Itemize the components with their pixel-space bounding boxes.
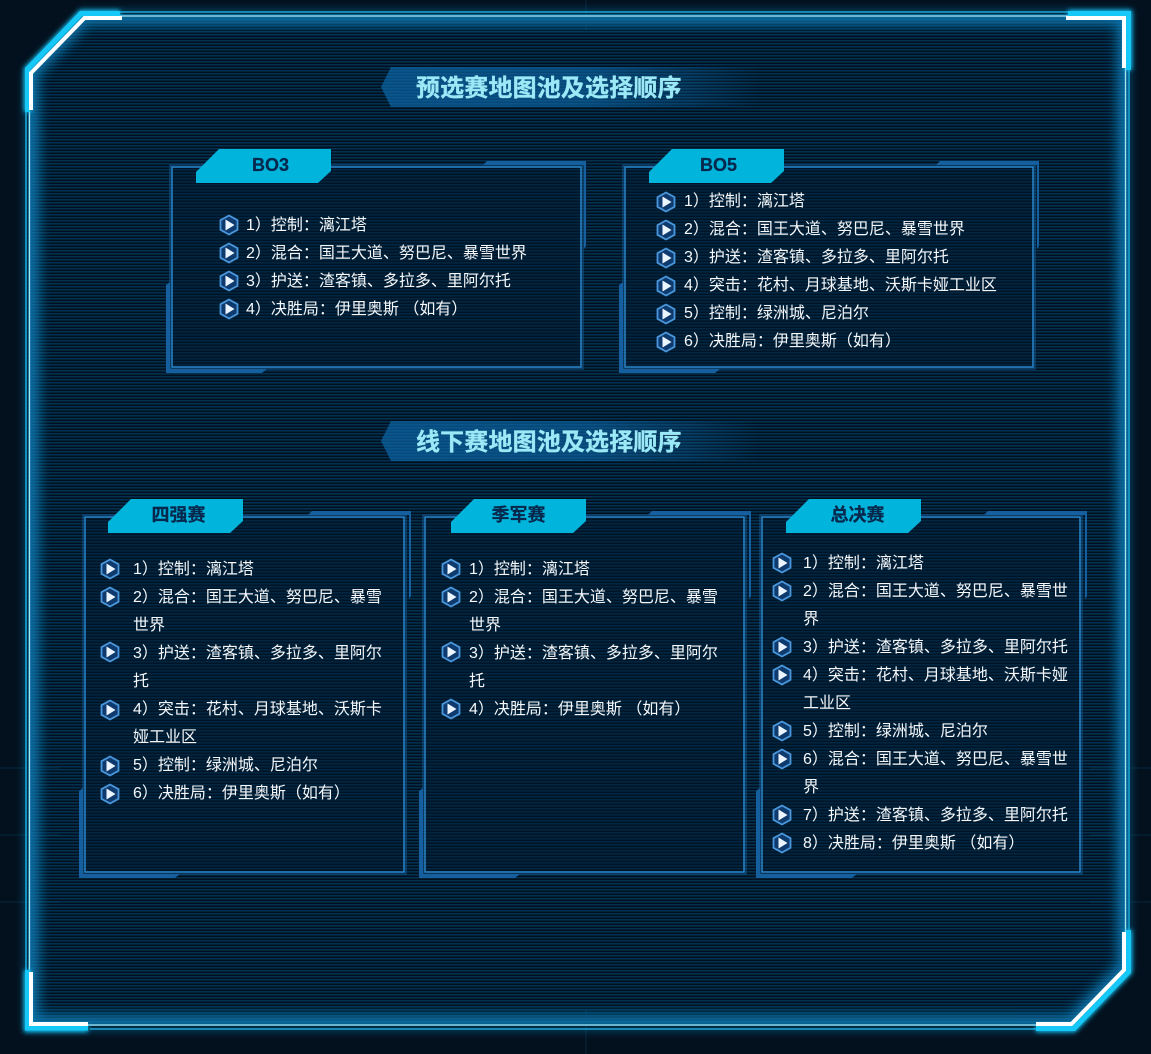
item: 7）护送：渣客镇、多拉多、里阿尔托	[803, 807, 1068, 824]
heading: 预选赛地图池及选择顺序	[381, 67, 744, 107]
tab: 季军赛: 季军赛	[492, 505, 546, 525]
item	[469, 588, 718, 634]
icon	[772, 636, 792, 658]
panel: 四强赛: 世界	[133, 617, 165, 634]
icon	[220, 298, 238, 320]
icon	[772, 748, 792, 770]
panel: 季军赛: 世界	[469, 617, 501, 634]
heading: 预选赛地图池及选择顺序: 预选赛地图池及选择顺序	[416, 75, 682, 102]
item: 6）决胜局：伊里奥斯（如有）	[684, 333, 901, 350]
item: 8）决胜局：伊里奥斯 （如有）	[803, 835, 1024, 852]
icon	[656, 332, 676, 352]
item: 3）护送：渣客镇、多拉多、里阿尔	[469, 645, 718, 662]
item: 4）突击：花村、月球基地、沃斯卡娅	[803, 667, 1068, 684]
item: 2）混合：国王大道、努巴尼、暴雪世界	[684, 221, 965, 238]
item	[803, 582, 1068, 628]
panel: 总决赛: 界	[803, 779, 819, 796]
tab: 四强赛: 四强赛	[152, 505, 206, 525]
tab: BO5: BO5	[700, 155, 737, 175]
icon	[100, 586, 120, 608]
panel: 总决赛: 界	[803, 611, 819, 628]
item: 4）决胜局：伊里奥斯 （如有）	[469, 701, 690, 718]
item: 4）突击：花村、月球基地、沃斯卡	[133, 701, 382, 718]
icon	[220, 242, 238, 264]
item: 6）决胜局：伊里奥斯（如有）	[133, 785, 350, 802]
icon	[100, 756, 120, 776]
item: 5）控制：绿洲城、尼泊尔	[684, 305, 869, 322]
item: 2）混合：国王大道、努巴尼、暴雪	[469, 589, 718, 606]
icon	[772, 552, 792, 574]
item: 4）决胜局：伊里奥斯 （如有）	[246, 301, 467, 318]
icon	[656, 276, 676, 296]
item	[133, 588, 382, 634]
item: 1）控制：漓江塔	[803, 555, 924, 572]
icon	[772, 664, 792, 686]
panel: 总决赛: 工业区	[803, 695, 851, 712]
icon	[100, 642, 120, 662]
icon	[442, 558, 460, 580]
item: 2）混合：国王大道、努巴尼、暴雪	[133, 589, 382, 606]
item: 1）控制：漓江塔	[133, 561, 254, 578]
heading: 线下赛地图池及选择顺序	[381, 421, 744, 461]
tab: 总决赛: 总决赛	[830, 505, 884, 525]
item	[469, 644, 718, 690]
item: 2）混合：国王大道、努巴尼、暴雪世界	[246, 245, 527, 262]
icon	[220, 214, 238, 236]
icon	[100, 784, 120, 804]
item: 3）护送：渣客镇、多拉多、里阿尔托	[246, 273, 511, 290]
tab: BO3: BO3	[252, 155, 289, 175]
icon	[100, 558, 120, 580]
item: 4）突击：花村、月球基地、沃斯卡娅工业区	[684, 277, 997, 294]
item: 3）护送：渣客镇、多拉多、里阿尔	[133, 645, 382, 662]
icon	[656, 220, 676, 240]
item: 5）控制：绿洲城、尼泊尔	[133, 757, 318, 774]
item: 3）护送：渣客镇、多拉多、里阿尔托	[803, 639, 1068, 656]
item	[803, 750, 1068, 796]
icon	[656, 248, 676, 268]
icon	[220, 270, 238, 292]
icon	[442, 698, 460, 720]
item: 2）混合：国王大道、努巴尼、暴雪世	[803, 583, 1068, 600]
item: 1）控制：漓江塔	[246, 217, 367, 234]
item	[133, 644, 382, 690]
icon	[656, 304, 676, 324]
panel: 四强赛: 托	[133, 673, 149, 690]
panel: 季军赛: 托	[469, 673, 485, 690]
icon	[772, 804, 792, 826]
icon	[442, 586, 460, 608]
item	[803, 666, 1068, 712]
icon	[772, 580, 792, 602]
heading: 线下赛地图池及选择顺序: 线下赛地图池及选择顺序	[416, 429, 682, 456]
item: 6）混合：国王大道、努巴尼、暴雪世	[803, 751, 1068, 768]
item: 1）控制：漓江塔	[469, 561, 590, 578]
icon	[442, 642, 460, 662]
icon	[772, 832, 792, 854]
icon	[656, 192, 676, 212]
item: 3）护送：渣客镇、多拉多、里阿尔托	[684, 249, 949, 266]
icon	[100, 700, 120, 720]
panel: 四强赛: 娅工业区	[133, 729, 197, 746]
item: 5）控制：绿洲城、尼泊尔	[803, 723, 988, 740]
item	[133, 700, 382, 746]
icon	[772, 720, 792, 742]
item: 1）控制：漓江塔	[684, 193, 805, 210]
